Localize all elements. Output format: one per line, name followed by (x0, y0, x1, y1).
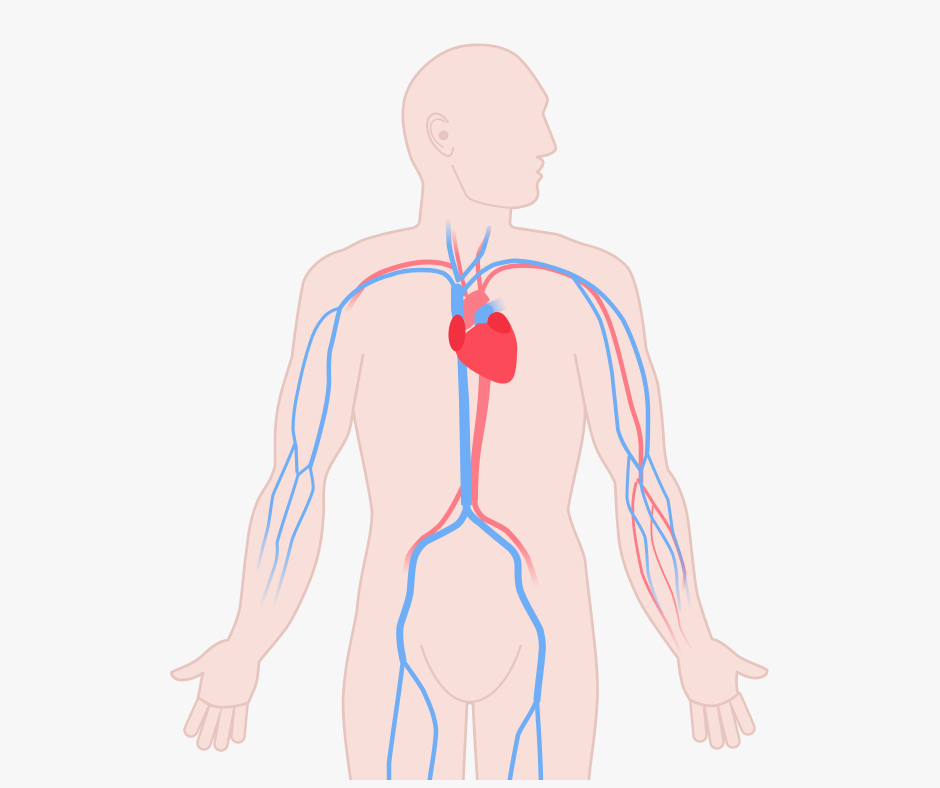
neck veins (448, 220, 458, 280)
arteries (347, 230, 691, 653)
right iliac artery (472, 500, 538, 584)
descending aorta (470, 375, 491, 500)
body silhouette (172, 45, 767, 788)
superior and inferior vena cava (451, 284, 472, 505)
left forearm veins (258, 443, 295, 568)
right shoulder artery (482, 266, 641, 482)
veins (258, 220, 690, 788)
pelvis line (421, 645, 521, 702)
left arm veins (310, 270, 456, 467)
heart body (456, 321, 518, 384)
pulmonary artery (481, 303, 504, 322)
ear (427, 113, 453, 156)
left atrium (488, 312, 511, 333)
left iliac vein (400, 506, 467, 660)
femoral veins (537, 700, 541, 788)
blood vessels (258, 220, 691, 788)
right atrium (448, 314, 466, 352)
right forearm veins (648, 455, 690, 607)
left shoulder artery (358, 262, 453, 290)
heart (448, 303, 517, 384)
right iliac vein (466, 506, 542, 700)
left iliac artery (405, 488, 462, 572)
jaw line (452, 165, 511, 208)
forearm arteries (638, 480, 685, 592)
fingers (191, 698, 748, 744)
neck arteries (453, 230, 466, 295)
aortic arch (462, 290, 490, 331)
illustration: human circulatory system (170, 44, 768, 780)
right shoulder veins (458, 261, 648, 453)
